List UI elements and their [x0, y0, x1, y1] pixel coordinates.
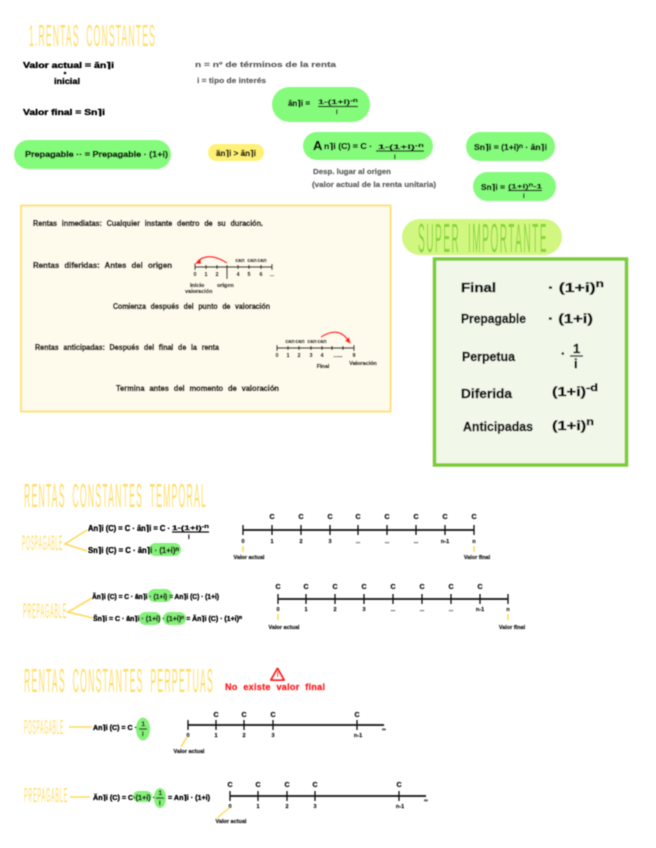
timeline: temporal prepagable: C — [303, 584, 309, 591]
timeline: perpetua pospagable: C — [354, 712, 360, 719]
timeline: temporal prepagable: Valor final — [499, 625, 526, 631]
timeline: temporal prepagable — [269, 584, 526, 631]
formulas: pospagable: 1-(1+i) — [172, 525, 191, 532]
timeline: temporal pospagable: C — [384, 514, 390, 521]
timeline: anticipada: 3 — [309, 353, 313, 359]
timeline: diferida: valoración — [185, 289, 213, 295]
panel: tipos de renta — [21, 206, 390, 412]
timeline: temporal prepagable: n-1 — [476, 607, 484, 613]
timeline: temporal prepagable: C — [448, 584, 454, 591]
timeline: perpetua pospagable: 0 — [186, 733, 190, 739]
panel: multiplicadores — [434, 259, 626, 465]
timeline: perpetua pospagable: n-1 — [354, 733, 362, 739]
timeline: anticipada: Final — [317, 364, 330, 370]
timeline: perpetua pospagable: 3 — [271, 733, 275, 739]
timeline: temporal prepagable: ... — [420, 607, 425, 613]
timeline: temporal prepagable: C — [390, 584, 396, 591]
timeline: anticipada: 2 — [297, 353, 301, 359]
timeline: temporal prepagable: C — [477, 584, 483, 591]
timeline: temporal prepagable: C — [275, 584, 281, 591]
formula pill: A n i (C) — [303, 132, 433, 161]
timeline: temporal prepagable: C — [361, 584, 367, 591]
timeline: temporal pospagable: ... — [414, 539, 419, 545]
timeline: temporal pospagable: Valor final — [464, 555, 491, 561]
timeline: anticipada: Valoración — [349, 361, 378, 367]
row: prepagable — [461, 311, 593, 326]
row: perpetua: 1 — [573, 341, 580, 356]
timeline: temporal prepagable: ... — [449, 607, 454, 613]
text: termina antes: Termina antes del momento de valoración — [116, 384, 279, 393]
timeline: temporal pospagable: C — [413, 514, 419, 521]
timeline: temporal pospagable: 0 — [241, 539, 245, 545]
row: final: · (1+i) — [548, 280, 583, 295]
timeline: anticipada: 9 — [352, 353, 356, 359]
timeline: temporal pospagable: Valor actual — [234, 555, 265, 561]
definitions: valor actual and valor final: inicial — [54, 77, 80, 86]
heading pill: super importante — [402, 215, 562, 261]
row: diferida: -d — [586, 383, 598, 394]
timeline: perpetua prepagable: 1 — [256, 804, 260, 810]
timeline: temporal pospagable: ... — [385, 539, 390, 545]
row: perpetua — [462, 341, 583, 371]
timeline: perpetua pospagable: ∞ — [382, 727, 386, 733]
row: anticipadas — [463, 417, 594, 434]
text: POSPAGABLE — [24, 717, 64, 739]
formulas: pospagable: i — [188, 534, 190, 541]
timeline: temporal prepagable: 1 — [304, 607, 308, 613]
note under formula: Desp. lugar al origen — [313, 167, 391, 176]
formula pill: A n i (C): 1-(1+i) — [378, 144, 397, 151]
row: anticipadas: Anticipadas — [463, 419, 533, 434]
formula pill: a n i: i — [336, 109, 338, 116]
text: rentas inmediatas: Rentas inmediatas: Cualquier instante dentro de su duración. — [33, 219, 263, 228]
row: final: Final — [461, 280, 496, 295]
formulas: prepagable: n — [181, 615, 184, 621]
timeline: temporal prepagable: 2 — [333, 607, 337, 613]
formulas: prepagable: Än⌉i (C) = C · ān⌉i · (1+i) = An⌉i (C) · (1+i) — [92, 593, 219, 601]
timeline: anticipada: 4 — [320, 353, 324, 359]
formulas: pospagable: Sn⌉i (C) = C · ān⌉i · (1+i) — [88, 546, 178, 555]
text: POSPAGABLE — [22, 532, 63, 555]
timeline: temporal pospagable: C — [471, 514, 477, 521]
timeline: anticipada: ...... — [333, 353, 343, 359]
row: final: n — [596, 279, 604, 290]
formulas: pospagable: An⌉i (C) = C · ān⌉i = C · — [88, 524, 170, 533]
timeline: perpetua prepagable: 2 — [285, 804, 289, 810]
timeline: perpetua prepagable: 0 — [228, 804, 232, 810]
timeline: diferida: 5 — [247, 272, 251, 278]
formula pill: S n i — [466, 132, 555, 161]
timeline: anticipada: can — [307, 339, 317, 345]
timeline: temporal prepagable: n — [506, 607, 510, 613]
formula pill: S n i fraction: i — [523, 193, 525, 200]
timeline: perpetua prepagable: C — [312, 782, 318, 789]
formula pill: S n i: Sn⌉i = (1+i) — [474, 143, 516, 152]
comparison pill — [208, 144, 264, 161]
bracket: prepagable — [68, 598, 93, 618]
row: diferida — [461, 383, 598, 401]
formulas: pospagable: n — [175, 547, 179, 553]
formula pill: a n i: ān⌉i = — [288, 99, 310, 108]
timeline: temporal prepagable: ... — [391, 607, 396, 613]
timeline: anticipada: 0 — [275, 353, 279, 359]
bracket: pospagable — [65, 530, 87, 551]
timeline: diferida — [185, 257, 275, 295]
timeline: temporal pospagable: n-1 — [441, 539, 449, 545]
timeline: diferida: origen — [217, 283, 234, 289]
timeline: temporal prepagable: 3 — [362, 607, 366, 613]
row: anticipadas: n — [586, 417, 594, 428]
formula: prepagable perpetua — [93, 788, 210, 808]
note under formula — [312, 167, 437, 189]
timeline: temporal pospagable: C — [442, 514, 448, 521]
timeline: perpetua pospagable: C — [213, 712, 219, 719]
row: final — [461, 279, 604, 295]
timeline: perpetua prepagable: Valor actual — [216, 819, 247, 825]
timeline: temporal pospagable: C — [327, 514, 333, 521]
legend: n and i — [195, 60, 337, 85]
row: prepagable: Prepagable — [461, 311, 526, 326]
timeline: diferida: inicio — [190, 283, 205, 289]
text: PREPAGABLE — [24, 785, 68, 807]
timeline: temporal pospagable: C — [269, 514, 275, 521]
timeline: temporal prepagable: 0 — [276, 607, 280, 613]
timeline: temporal pospagable — [234, 514, 491, 561]
connector: prepagable — [70, 796, 90, 798]
timeline: anticipada: can — [317, 339, 327, 345]
timeline: perpetua prepagable: 3 — [313, 804, 317, 810]
formula pill: a n i — [272, 87, 370, 122]
timeline: perpetua pospagable: C — [241, 712, 247, 719]
timeline: temporal prepagable: C — [419, 584, 425, 591]
row: diferida: (1+i) — [552, 384, 579, 399]
formula pill: a n i: -n — [350, 98, 358, 104]
timeline: diferida: 2 — [215, 272, 219, 278]
text: rentas diferidas: Rentas diferidas: Antes del origen — [33, 261, 172, 270]
timeline: diferida: can — [257, 258, 267, 264]
timeline: perpetua pospagable: 2 — [242, 733, 246, 739]
icon: warning triangle — [271, 668, 284, 680]
timeline: perpetua prepagable: n-1 — [396, 804, 404, 810]
timeline: diferida: 6 — [259, 272, 263, 278]
row: diferida: Diferida — [461, 386, 513, 401]
timeline: diferida: 4 — [236, 272, 240, 278]
formula: prepagable perpetua: = An⌉i · (1+i) — [168, 794, 210, 802]
row: perpetua: · — [561, 346, 565, 361]
timeline: perpetua prepagable — [216, 782, 428, 825]
timeline: perpetua prepagable: C — [284, 782, 290, 789]
timeline: diferida: can — [247, 258, 257, 264]
formulas: pospagable: -n — [202, 524, 209, 530]
legend: n and i: n = nº de términos de la renta — [195, 60, 337, 69]
row: perpetua: i — [574, 356, 578, 371]
timeline: perpetua pospagable — [174, 712, 386, 755]
formula pill: a n i: 1-(1+i) — [318, 99, 337, 106]
timeline: perpetua prepagable: ∞ — [424, 798, 428, 804]
timeline: anticipada: can — [295, 339, 305, 345]
formula pill: prepagable — [14, 140, 171, 169]
formula pill: A n i (C): A — [313, 138, 323, 153]
timeline: perpetua prepagable: C — [255, 782, 261, 789]
formulas: pospagable — [88, 524, 209, 556]
formula pill: S n i fraction: Sn⌉i = — [481, 183, 505, 192]
timeline: diferida: can — [235, 258, 245, 264]
text: rentas anticipadas: Rentas anticipadas: Después del final de la renta — [35, 343, 219, 352]
timeline: diferida: 1 — [204, 272, 208, 278]
timeline: temporal pospagable: C — [298, 514, 304, 521]
timeline: temporal pospagable: 3 — [328, 539, 332, 545]
formulas: prepagable: n — [239, 615, 242, 621]
timeline: perpetua pospagable: 1 — [214, 733, 218, 739]
row: perpetua: Perpetua — [462, 349, 516, 364]
callout: no existe valor final: No existe valor final — [225, 682, 325, 692]
formula pill: prepagable: Prepagable ·· = Prepagable · (1+i) — [25, 150, 168, 159]
formula: pospagable perpetua: i — [142, 731, 144, 738]
timeline: temporal pospagable: C — [355, 514, 361, 521]
formula pill: S n i fraction — [473, 172, 556, 201]
text: PREPAGABLE — [23, 600, 67, 623]
formulas: prepagable — [92, 589, 242, 625]
timeline: anticipada: 1 — [286, 353, 290, 359]
formula: prepagable perpetua: Än⌉i (C) = C·(1+i) · — [93, 794, 155, 802]
formula pill: A n i (C): -n — [415, 143, 424, 149]
formula pill: S n i fraction: -1 — [533, 184, 543, 190]
timeline: perpetua prepagable: C — [396, 782, 402, 789]
connector: pospagable — [69, 726, 92, 728]
text: 1.RENTAS CONSTANTES — [29, 18, 156, 53]
formula pill: S n i fraction: (1+i) — [508, 184, 522, 190]
legend: n and i: i = tipo de interés — [197, 76, 266, 85]
note under formula: (valor actual de la renta unitaria) — [312, 180, 437, 189]
timeline: temporal pospagable: 2 — [299, 539, 303, 545]
text: comienza despues: Comienza después del punto de valoración — [113, 302, 270, 311]
formula pill: S n i: · ān⌉i — [523, 143, 547, 152]
formula pill: A n i (C): n⌉i (C) = C · — [324, 142, 372, 151]
row: prepagable: · (1+i) — [548, 311, 593, 326]
timeline: perpetua pospagable: C — [270, 712, 276, 719]
timeline: diferida: 0 — [193, 272, 197, 278]
formula: pospagable perpetua: An⌉i (C) = C · — [93, 724, 137, 732]
timeline: anticipada — [275, 332, 378, 370]
formula: pospagable perpetua: 1 — [142, 721, 146, 728]
formula: pospagable perpetua — [93, 718, 150, 740]
formula pill: S n i fraction: n — [529, 182, 533, 188]
formula pill: S n i: n — [519, 144, 523, 150]
timeline: temporal prepagable: C — [332, 584, 338, 591]
formulas: prepagable: S̈n⌉i = C · ān⌉i · (1+i) · (1+i) — [93, 616, 181, 623]
definitions: valor actual and valor final: Valor actual = ān⌉i — [23, 61, 114, 70]
formula: prepagable perpetua: 1 — [158, 790, 162, 797]
definitions: valor actual and valor final — [23, 61, 114, 117]
timeline: anticipada: can — [285, 339, 295, 345]
comparison pill: än⌉i > ān⌉i — [216, 149, 256, 158]
timeline: temporal pospagable: ... — [356, 539, 361, 545]
timeline: perpetua prepagable: C — [227, 782, 233, 789]
timeline: perpetua pospagable: Valor actual — [174, 749, 205, 755]
timeline: temporal pospagable: n — [472, 539, 476, 545]
row: anticipadas: (1+i) — [552, 418, 579, 433]
formula pill: A n i (C): i — [394, 154, 396, 161]
formula: prepagable perpetua: i — [159, 800, 161, 807]
formulas: prepagable: = Än⌉i (C) · (1+i) — [184, 615, 239, 623]
timeline: diferida: ... — [270, 272, 275, 278]
timeline: temporal pospagable: 1 — [270, 539, 274, 545]
timeline: temporal prepagable: Valor actual — [269, 625, 300, 631]
definitions: valor actual and valor final: Valor final = Sn⌉i — [23, 108, 105, 117]
